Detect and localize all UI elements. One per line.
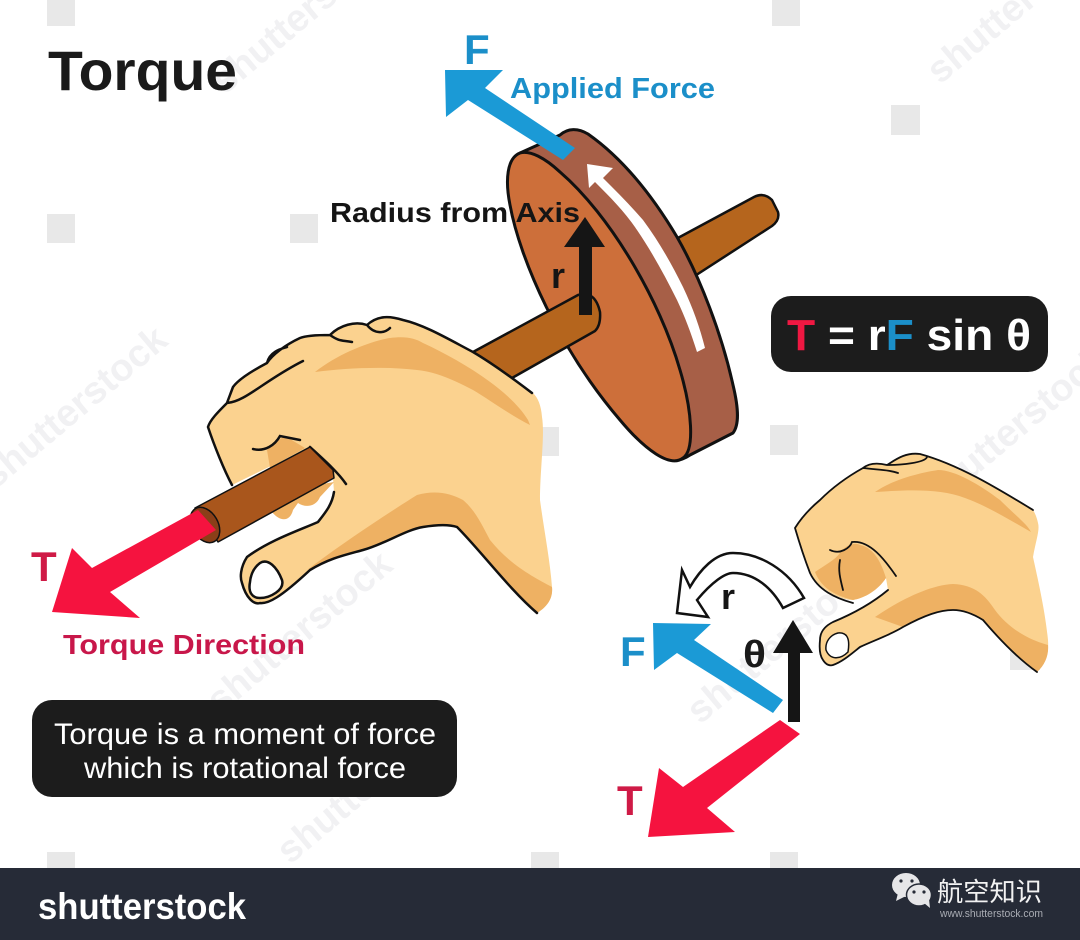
small T label: T — [617, 777, 643, 824]
axle: rear segment — [650, 195, 778, 292]
rod end — [184, 502, 226, 548]
small radius arrow — [773, 620, 813, 722]
hand body — [208, 317, 552, 613]
small torque arrow — [648, 720, 800, 837]
formula: T = rF sin θ — [787, 311, 1031, 360]
rim rotation arrow — [587, 164, 705, 352]
footer bar — [0, 868, 1080, 940]
r label small: r — [721, 576, 735, 617]
theta label: θ — [743, 634, 766, 676]
hand body — [795, 454, 1048, 672]
curved r arrow — [677, 553, 804, 617]
text: shutterstock — [679, 553, 881, 732]
bottom shade — [307, 493, 552, 613]
hand outline — [208, 317, 537, 613]
definition box — [32, 700, 457, 797]
website: www.shutterstock.com — [939, 908, 1043, 920]
applied force label: Applied Force — [510, 73, 715, 105]
torque direction label: Torque Direction — [63, 629, 305, 660]
torque direction arrow — [52, 510, 216, 618]
definition text: Torque is a moment of force — [54, 718, 436, 751]
radius r label: r — [551, 255, 565, 296]
text: shutterst.ck — [269, 701, 461, 872]
thumbnail — [249, 562, 282, 598]
disc front face — [507, 152, 691, 461]
axle: front segment — [473, 294, 600, 378]
radius label: Radius from Axis — [330, 197, 580, 228]
hand outline — [795, 454, 1037, 672]
disc wheel — [507, 130, 738, 461]
wechat account name: 航空知识 — [937, 872, 1042, 909]
definition box: which is rotational force — [83, 752, 406, 785]
top shade — [875, 470, 1031, 532]
fingers below rod — [272, 482, 334, 519]
small force arrow — [653, 623, 783, 713]
bottom shade — [875, 584, 1048, 672]
top shade — [315, 337, 530, 425]
T label: T — [31, 543, 57, 590]
thumbnail — [826, 633, 849, 658]
grip rod — [195, 447, 334, 542]
text: shutterstock — [199, 543, 401, 722]
small F label: F — [620, 628, 646, 675]
disc rim — [520, 130, 738, 460]
small hand — [795, 454, 1048, 672]
fingers — [815, 544, 886, 600]
F label: F — [464, 26, 490, 73]
applied force arrow — [445, 70, 575, 160]
title: Torque — [48, 39, 237, 102]
large hand — [184, 317, 552, 613]
wechat icon — [892, 873, 932, 908]
shutterstock logo: shutterstock — [38, 886, 246, 927]
finger above rod — [267, 436, 305, 468]
formula box — [771, 296, 1048, 372]
radius arrow — [564, 217, 605, 315]
